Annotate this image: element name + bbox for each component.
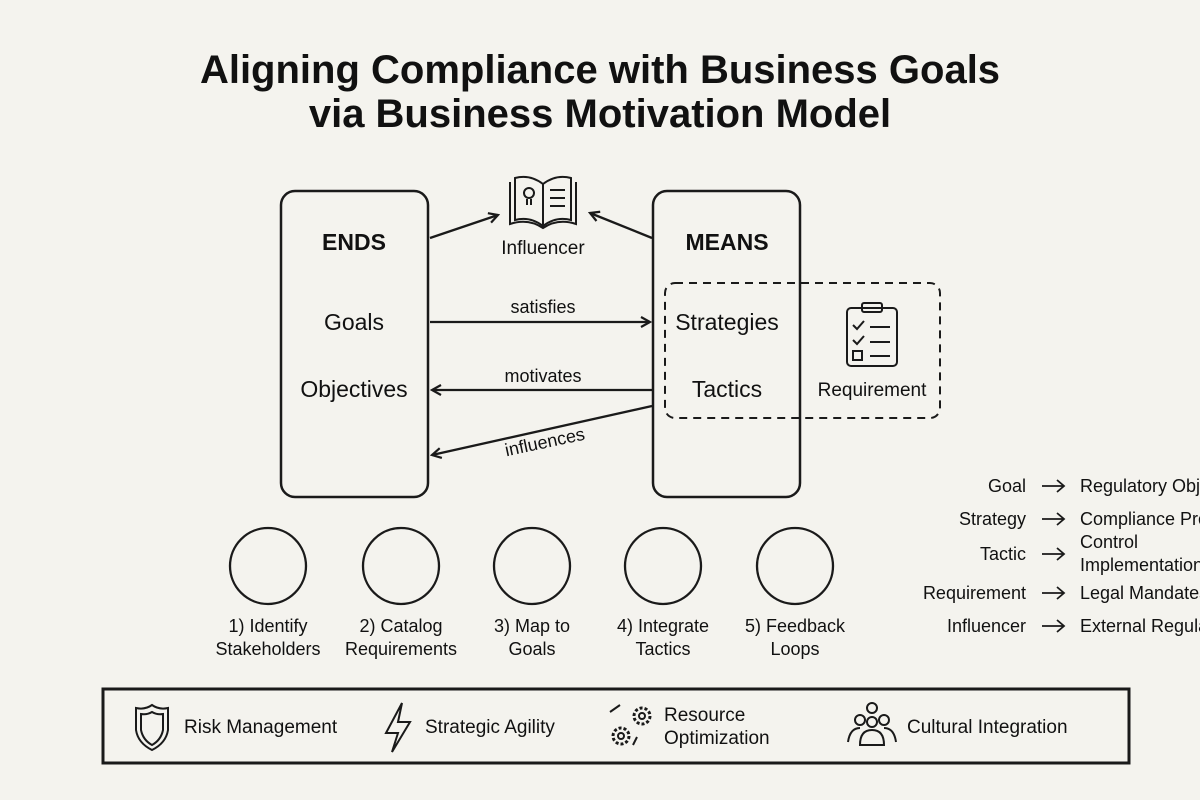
step labels: 3) Map to (494, 616, 570, 636)
step labels: 5) Feedback (745, 616, 846, 636)
legend mapping: Requirement (923, 583, 1026, 603)
step labels: Loops (770, 639, 820, 659)
step labels (215, 616, 846, 659)
panel: benefits bar: Resource (664, 705, 745, 726)
step labels: 1) Identify (228, 616, 308, 636)
arrows (430, 213, 652, 455)
steps (230, 528, 833, 604)
icon: influencer book (510, 177, 576, 228)
arrow labels: motivates (504, 366, 582, 386)
panel: ends: Objectives (300, 376, 408, 402)
label: influencer: Influencer (501, 238, 585, 259)
panel: ends: Goals (324, 309, 384, 335)
legend mapping: Implementation (1080, 555, 1200, 575)
panel: benefits bar: Cultural Integration (907, 717, 1068, 738)
title (200, 48, 1000, 136)
icon: clipboard (847, 303, 897, 366)
legend mapping: Control (1080, 532, 1138, 552)
panel: benefits bar (103, 689, 1129, 763)
panel: benefits bar: Strategic Agility (425, 717, 555, 738)
legend mapping: Influencer (947, 616, 1026, 636)
panel: ends: ENDS (322, 229, 386, 255)
icon: people (848, 703, 896, 745)
panel: benefits bar: Optimization (664, 728, 770, 749)
dashed requirement box: Requirement (818, 380, 927, 401)
step labels: Tactics (635, 639, 691, 659)
step labels: Stakeholders (215, 639, 321, 659)
step labels: Requirements (345, 639, 457, 659)
icon: shield (136, 705, 168, 750)
dashed requirement box (665, 283, 940, 418)
panel: ends (281, 191, 428, 497)
panel: means: Tactics (692, 376, 762, 402)
arrow labels: satisfies (510, 297, 576, 317)
icon: lightning (386, 703, 410, 752)
icon: gears (610, 705, 650, 745)
step labels: 2) Catalog (359, 616, 443, 636)
panel: means: Strategies (675, 309, 779, 335)
step labels: 4) Integrate (617, 616, 709, 636)
panel: means (653, 191, 800, 497)
legend mapping: Goal (988, 476, 1026, 496)
arrow labels: influences (503, 424, 587, 460)
legend mapping: Strategy (959, 509, 1026, 529)
step labels: Goals (508, 639, 556, 659)
title: Aligning Compliance with Business Goals (200, 48, 1000, 92)
legend mapping (923, 476, 1200, 636)
panel: means: MEANS (685, 229, 769, 255)
title: via Business Motivation Model (309, 92, 891, 136)
arrow labels (503, 297, 587, 460)
legend mapping: Tactic (980, 544, 1026, 564)
panel: benefits bar: Risk Management (184, 717, 338, 738)
